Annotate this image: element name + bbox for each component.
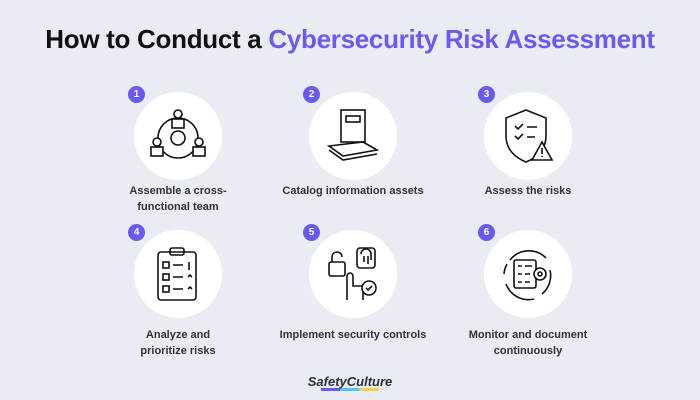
icon: clipboard — [157, 247, 197, 301]
step 6: Monitor and document — [469, 329, 587, 341]
step 6: 6 — [484, 227, 489, 238]
step 6 — [469, 224, 588, 357]
icon: monitor cycle — [503, 250, 552, 300]
step 1: 1 — [134, 89, 139, 100]
icon: shield warning — [505, 109, 554, 163]
step 6: continuously — [494, 345, 562, 357]
step 5: Implement security controls — [280, 329, 426, 341]
step 1: functional team — [137, 201, 219, 213]
step 4: Analyze and — [146, 329, 210, 341]
step 2 — [282, 86, 424, 197]
icon: security controls — [328, 247, 377, 300]
step 1 — [128, 86, 227, 213]
step 3 — [478, 86, 572, 197]
logo: SafetyCulture — [308, 374, 392, 389]
step 4: 4 — [134, 227, 139, 238]
step 4 — [128, 224, 222, 357]
step 5: 5 — [309, 227, 314, 238]
step 3: 3 — [484, 89, 489, 100]
step 4: prioritize risks — [140, 345, 216, 357]
icon: books — [327, 109, 380, 161]
step 5 — [280, 224, 426, 341]
step 2: 2 — [309, 89, 314, 100]
title: How to Conduct a Cybersecurity Risk Assessment — [45, 24, 655, 54]
step 3: Assess the risks — [485, 185, 571, 197]
icon: team — [150, 109, 206, 159]
step 1: Assemble a cross- — [129, 185, 227, 197]
step 2: Catalog information assets — [282, 185, 424, 197]
